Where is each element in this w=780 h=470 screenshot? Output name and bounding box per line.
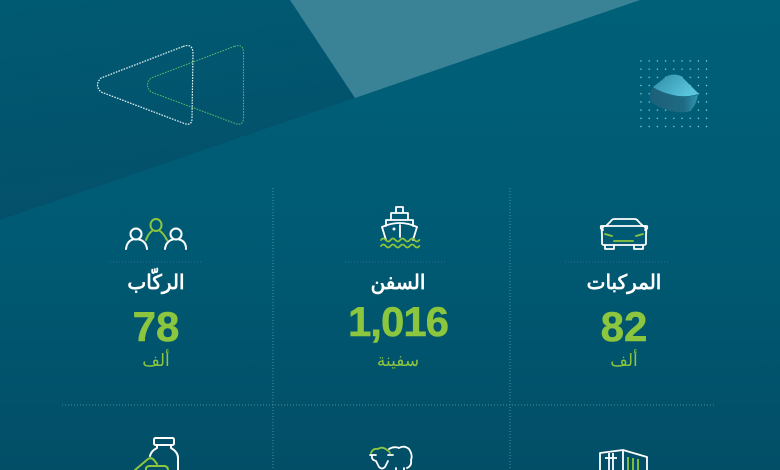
heading: ships: السفن: [371, 272, 425, 294]
grid dividers: [62, 188, 716, 470]
icon: car: [601, 219, 647, 249]
number: 1,016: 1,016: [348, 298, 448, 345]
stat: vehicles: [587, 272, 661, 370]
decoration: dot grid: [640, 60, 708, 128]
number: 78: 78: [133, 303, 179, 350]
stat: ships: [348, 272, 448, 370]
heading: vehicles: المركبات: [587, 272, 661, 294]
panel: dark diagonal wedge: [0, 0, 355, 220]
unit: thousand: ألف: [610, 351, 638, 370]
decoration: 3D cap shape: [649, 74, 699, 112]
icon: container: [600, 450, 647, 470]
stat: passengers: [127, 268, 185, 370]
decoration: white dashed triangle: [98, 46, 193, 124]
number: 82: 82: [601, 303, 647, 350]
icon: passengers: [126, 219, 186, 249]
icon: sheep: [370, 447, 412, 470]
unit: ship: سفينة: [377, 351, 419, 370]
panel: light triangle: [290, 0, 640, 98]
icon: jar and hand: [135, 438, 178, 470]
heading: passengers: الركّاب: [127, 272, 185, 294]
unit: thousand: ألف: [142, 351, 170, 370]
icon: ship: [381, 207, 419, 248]
decoration: green dashed triangle: [148, 46, 244, 124]
